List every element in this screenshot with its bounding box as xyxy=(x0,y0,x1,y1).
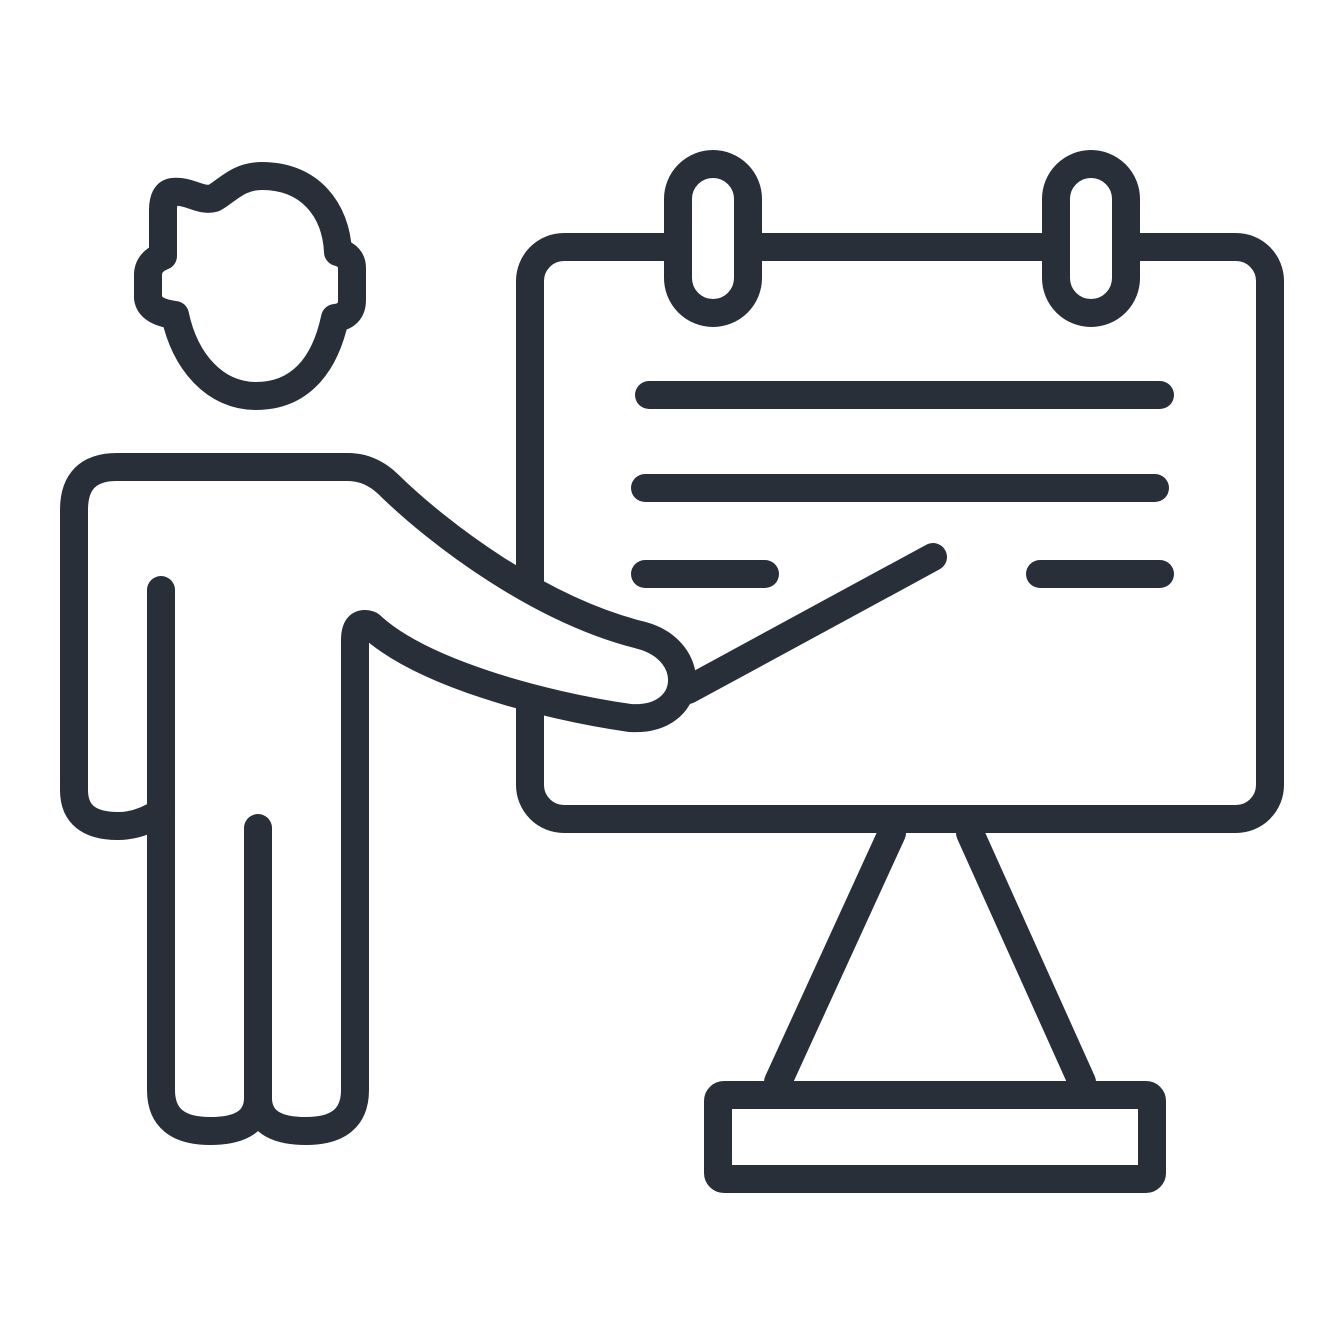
person head xyxy=(148,176,352,396)
icon: right clip xyxy=(1056,164,1126,313)
icon: left clip xyxy=(678,164,748,313)
pointer stick xyxy=(688,557,933,690)
person body xyxy=(74,467,682,1131)
text lines on board xyxy=(645,395,1160,574)
stand xyxy=(718,833,1152,1179)
whiteboard xyxy=(530,164,1270,819)
